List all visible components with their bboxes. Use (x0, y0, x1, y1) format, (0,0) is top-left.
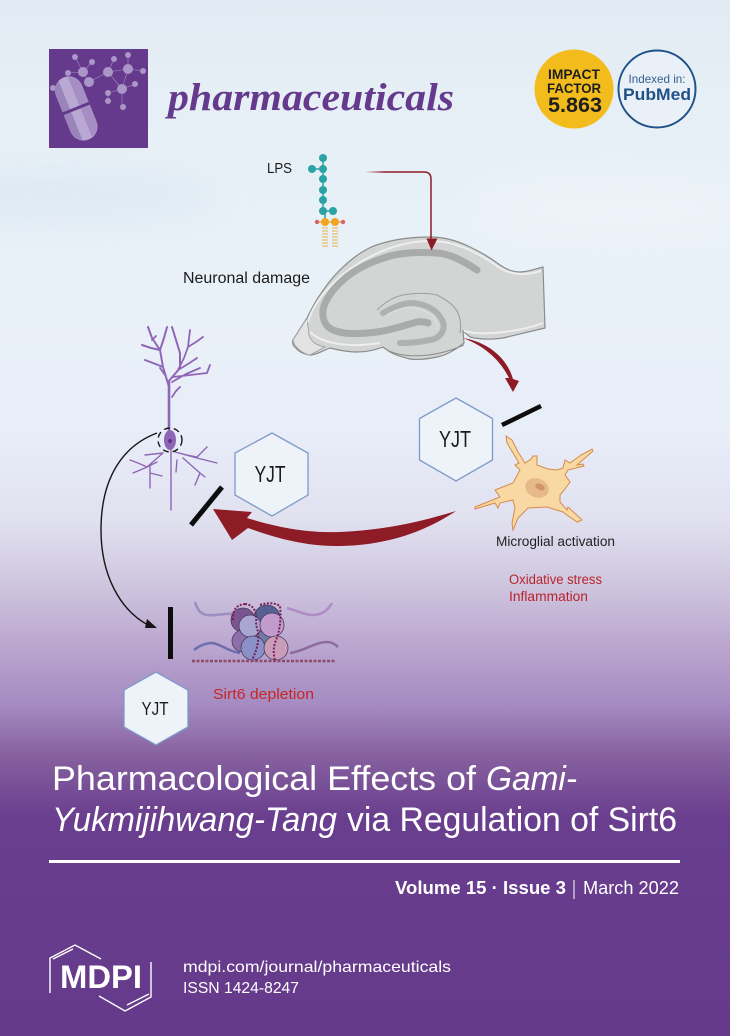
badge: impact factor (534, 50, 614, 128)
badge: impact factor: IMPACT (548, 66, 600, 82)
badge: PubMed: PubMed (623, 85, 691, 104)
illustration: hippocampus (293, 237, 545, 359)
neuron soma (158, 428, 182, 452)
article title: Pharmacological Effects of (52, 760, 477, 798)
MDPI logo: MDPI (60, 959, 142, 995)
badge: PubMed: Indexed in: (628, 72, 686, 86)
issue line: March 2022 (583, 878, 679, 898)
illustration: microglia (475, 436, 593, 530)
issue line (395, 878, 679, 899)
article title (52, 760, 677, 839)
MDPI logo (50, 945, 151, 1011)
arrow: microglia to neuron (213, 509, 456, 546)
journal name: pharmaceuticals (165, 76, 454, 119)
divider (49, 860, 680, 863)
inhibition bar left (191, 487, 222, 525)
label: oxidative stress and inflammation: Inflammation (509, 589, 588, 604)
label: LPS: LPS (267, 161, 292, 177)
hexagon: YJT left (235, 433, 308, 516)
label: microglial activation: Microglial activation (496, 534, 615, 549)
badge: PubMed (618, 50, 696, 128)
icon: LPS molecule (308, 154, 345, 248)
arrow: neuron to nucleosome (101, 433, 157, 628)
journal logo (49, 49, 148, 148)
illustration: nucleosome (192, 602, 338, 661)
hexagon: YJT right (420, 398, 492, 481)
journal url and ISSN: mdpi.com/journal/pharmaceuticals (183, 959, 451, 976)
article title: Gami- (486, 760, 577, 798)
journal url and ISSN (183, 959, 451, 997)
hexagon: YJT right: YJT (439, 426, 471, 452)
article title: Yukmijihwang-Tang (52, 801, 337, 839)
label: oxidative stress and inflammation: Oxidative stress (509, 572, 602, 587)
hexagon: YJT left: YJT (254, 461, 286, 487)
journal url and ISSN: ISSN 1424-8247 (183, 980, 299, 997)
label: oxidative stress and inflammation (509, 572, 602, 604)
illustration: neuron (130, 327, 217, 510)
hexagon: YJT bottom (124, 672, 188, 745)
badge: impact factor: 5.863 (548, 94, 602, 117)
badge: impact factor: FACTOR (547, 80, 601, 96)
hexagon: YJT bottom: YJT (142, 699, 168, 719)
label: neuronal damage: Neuronal damage (183, 270, 310, 287)
inhibition bar right (502, 406, 541, 425)
label: sirt6 depletion: Sirt6 depletion (213, 687, 314, 703)
article title: via Regulation of Sirt6 (347, 801, 677, 839)
arrow: LPS to hippocampus (365, 172, 438, 250)
issue line: Volume 15 · Issue 3 (395, 878, 566, 898)
arrow: hippocampus to microglia (463, 338, 519, 392)
inhibition bar bottom (168, 607, 173, 659)
